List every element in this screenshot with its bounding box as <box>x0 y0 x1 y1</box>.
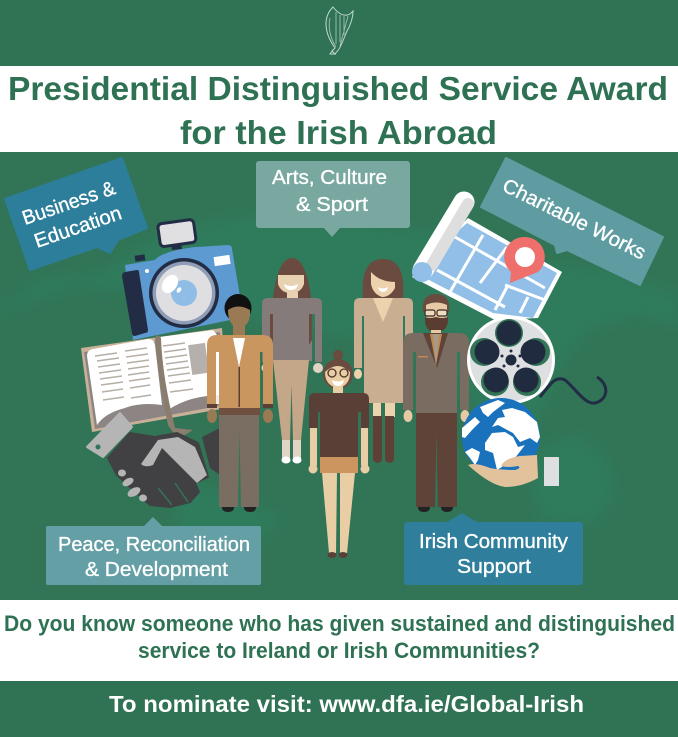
speech bubble: Business & Education: Education <box>31 202 125 253</box>
speech bubble: Irish Community Support <box>404 513 583 585</box>
question text: service to Ireland or Irish Communities? <box>138 638 540 663</box>
footer: nominate link <box>0 681 678 737</box>
title <box>8 70 668 151</box>
speech bubble: Peace, Reconciliation & Development <box>46 517 261 585</box>
top band <box>0 0 678 66</box>
person: woman in grey top <box>262 258 323 464</box>
footer: nominate link: To nominate visit: www.dfa.ie/Global-Irish <box>109 691 584 717</box>
speech bubble: Arts, Culture & Sport <box>256 161 410 237</box>
speech bubble: Peace, Reconciliation & Development: & Development <box>85 559 228 581</box>
speech bubble: Arts, Culture & Sport: & Sport <box>296 194 368 216</box>
speech bubble: Irish Community Support: Support <box>457 556 531 578</box>
speech bubble: Peace, Reconciliation & Development: Peace, Reconciliation <box>58 534 250 556</box>
icon: camera <box>122 219 243 340</box>
icon: open book <box>81 328 227 438</box>
speech bubble: Business & Education: Business & <box>19 177 119 230</box>
speech bubble: Arts, Culture & Sport: Arts, Culture <box>272 167 387 189</box>
icon: city map scroll <box>412 202 562 320</box>
question text <box>4 611 675 663</box>
title: Presidential Distinguished Service Award <box>8 70 668 107</box>
icon: film reel <box>467 316 606 404</box>
title: for the Irish Abroad <box>180 114 497 151</box>
speech bubble: Charitable Works <box>481 158 663 285</box>
speech bubble: Irish Community Support: Irish Community <box>419 531 568 553</box>
icon: handshake <box>87 413 220 507</box>
background: world map panel <box>0 152 678 600</box>
speech bubble: Charitable Works: Charitable Works <box>499 175 649 264</box>
person: woman in beige dress <box>354 259 413 463</box>
person: man with cardigan <box>207 294 273 512</box>
icon: harp <box>326 7 353 54</box>
person: man with beard <box>403 294 470 512</box>
speech bubble: Business & Education <box>5 158 147 270</box>
person: girl with glasses <box>308 350 370 558</box>
icon: globe in hand <box>462 398 559 487</box>
